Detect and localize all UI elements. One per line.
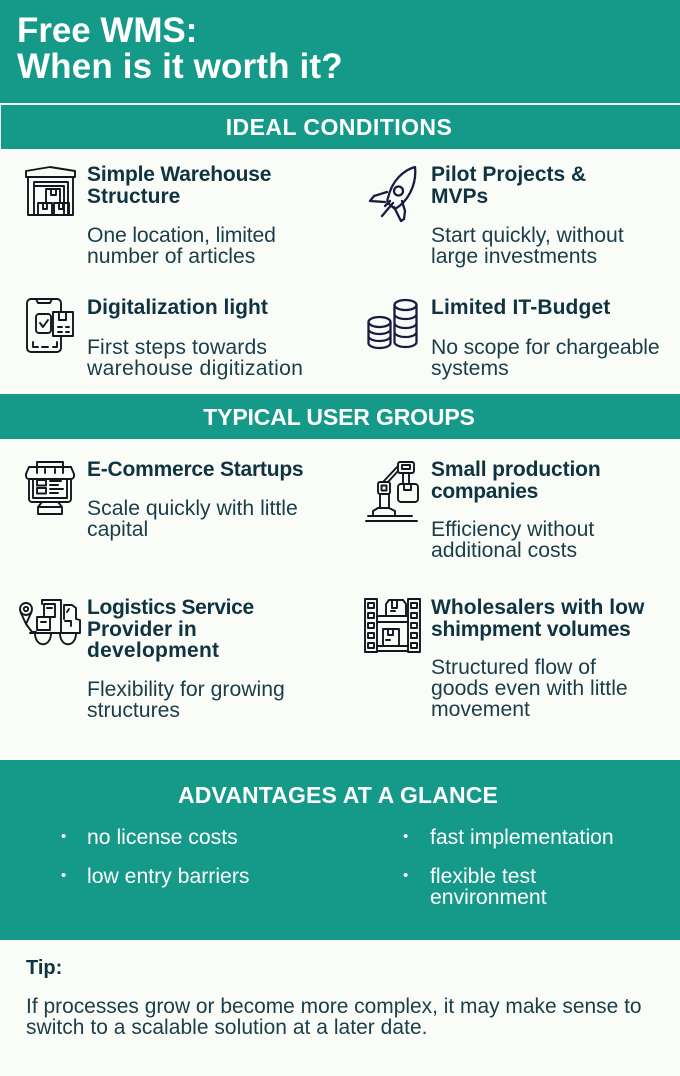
icon: warehouse — [25, 166, 76, 216]
bullet: fast implementation: • — [403, 828, 408, 845]
text: wholesalers: goods even with little — [431, 677, 628, 700]
text: small production companies: Efficiency without — [431, 518, 594, 541]
item: wholesalers: shimpment volumes — [431, 618, 631, 640]
title: Free WMS: — [17, 11, 197, 50]
icon: rocket — [368, 166, 416, 222]
text: limited it budget: systems — [431, 357, 509, 380]
text: digitalization light: First steps towards — [87, 336, 267, 359]
text: pilot projects: Start quickly, without — [431, 224, 624, 247]
text: flexible test environment: environment — [430, 886, 547, 909]
item: wholesalers: Wholesalers with low — [431, 596, 644, 619]
heading: typical user groups: TYPICAL USER GROUPS — [203, 404, 475, 430]
tip text — [26, 995, 642, 1039]
item: digitalization light: Digitalization light — [87, 296, 268, 319]
title banner — [0, 0, 680, 103]
icon: coins — [367, 298, 418, 350]
text: pilot projects: large investments — [431, 245, 597, 268]
text: no license costs: no license costs — [87, 826, 238, 849]
tip text: switch to a scalable solution at a later date. — [26, 1016, 428, 1039]
text: e-commerce startups — [87, 497, 298, 541]
text: logistics service provider: structures — [87, 699, 180, 722]
item: logistics service provider: Logistics Service — [87, 596, 254, 619]
panel: advantages at a glance — [0, 760, 680, 940]
item: simple warehouse structure: Structure — [87, 184, 180, 208]
text: wholesalers: Structured flow of — [431, 656, 596, 679]
item: pilot projects: Pilot Projects & — [431, 163, 586, 186]
heading: advantages: ADVANTAGES AT A GLANCE — [178, 782, 498, 808]
bullet: no license costs: • — [61, 828, 66, 845]
item: logistics service provider: development — [87, 639, 219, 662]
text: small production companies — [431, 518, 594, 562]
text: e-commerce startups: Scale quickly with little — [87, 497, 298, 520]
text: simple warehouse — [87, 224, 276, 268]
text: simple warehouse: One location, limited — [87, 224, 276, 247]
text: small production companies: additional costs — [431, 539, 577, 562]
text: wholesalers: movement — [431, 698, 530, 721]
heading: typical user groups — [0, 394, 680, 439]
bullet: low entry barriers: • — [61, 867, 66, 884]
text: flexible test environment — [430, 865, 547, 909]
text: limited it budget: No scope for chargeable — [431, 336, 660, 359]
item: pilot projects: MVPs — [431, 184, 488, 208]
item: simple warehouse structure: Simple Warehouse — [87, 163, 271, 186]
icon: online shop — [25, 461, 75, 515]
icon: delivery truck with pin — [19, 599, 81, 646]
tip text: If processes grow or become more complex, it may make sense to — [26, 995, 642, 1018]
item: small production companies: companies — [431, 480, 538, 502]
text: digitalization light — [87, 336, 303, 380]
tip label: Tip: — [26, 957, 62, 979]
bullet: flexible test environment: • — [403, 867, 408, 884]
heading: ideal conditions: IDEAL CONDITIONS — [226, 114, 452, 140]
text: wholesalers — [431, 656, 628, 721]
icon: robot arm — [365, 461, 419, 522]
item: e-commerce startups: E-Commerce Startups — [87, 458, 303, 481]
text: flexible test environment: flexible test — [430, 865, 536, 888]
item: logistics service provider: Provider in — [87, 618, 197, 640]
icon: phone with parcel — [26, 298, 74, 353]
item: small production companies: Small production — [431, 458, 601, 481]
text: simple warehouse: number of articles — [87, 245, 255, 268]
text: logistics service provider — [87, 678, 285, 722]
title — [17, 11, 343, 86]
item: simple warehouse structure — [87, 163, 271, 208]
text: digitalization light: warehouse digitization — [87, 357, 303, 380]
text: limited it budget — [431, 336, 660, 380]
title: When is it worth it? — [17, 47, 343, 86]
item: logistics service provider — [87, 596, 254, 662]
text: fast implementation: fast implementation — [430, 826, 614, 849]
item: limited it budget: Limited IT-Budget — [431, 296, 610, 319]
heading: ideal conditions — [1, 105, 680, 149]
text: low entry barriers: low entry barriers — [87, 865, 250, 888]
text: e-commerce startups: capital — [87, 518, 148, 541]
text: pilot projects — [431, 224, 624, 268]
text: logistics service provider: Flexibility for growing — [87, 678, 285, 701]
item: wholesalers — [431, 596, 644, 640]
icon: shelf with parcels — [364, 598, 421, 653]
item: small production companies — [431, 458, 601, 502]
item: pilot projects — [431, 163, 586, 208]
